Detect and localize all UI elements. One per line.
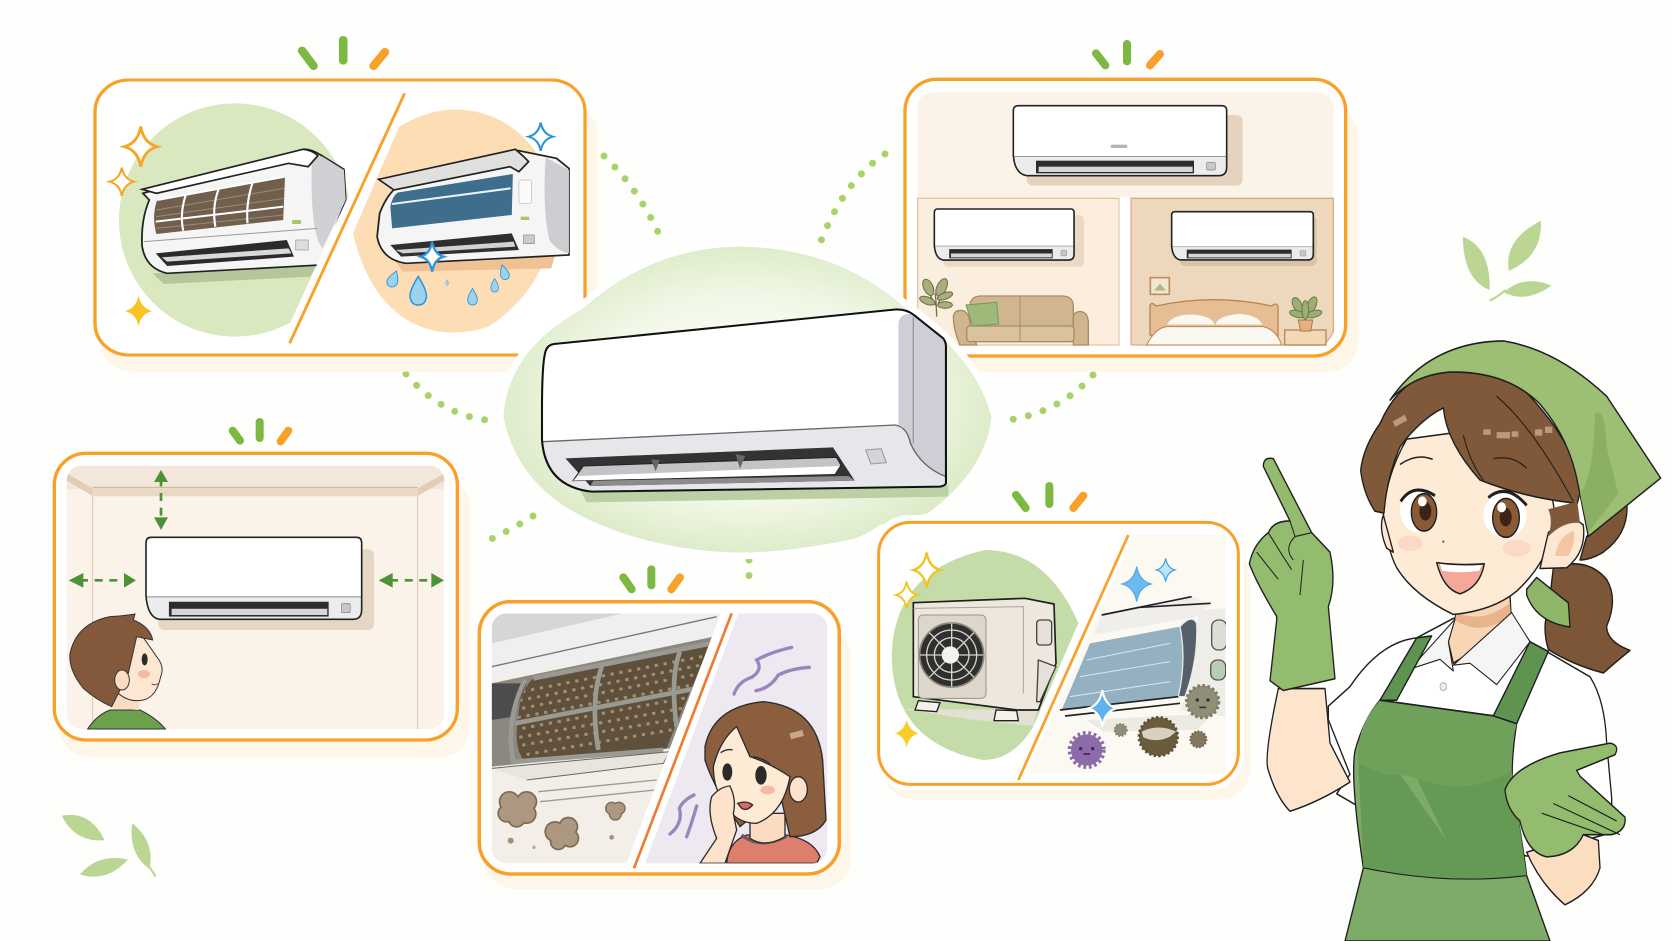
lower band bbox=[543, 425, 946, 492]
room wall bbox=[67, 466, 444, 729]
panel: dirty filter and odor bbox=[479, 569, 851, 889]
dust clumps bbox=[497, 791, 626, 850]
connector dots bbox=[406, 154, 1093, 588]
accent ticks bbox=[233, 422, 288, 441]
green blob bbox=[503, 247, 991, 553]
panel frame bbox=[95, 80, 585, 355]
accent ticks bbox=[1096, 44, 1160, 65]
panel shadow bbox=[485, 627, 851, 889]
right air conditioner open bbox=[377, 149, 569, 272]
panel shadow bbox=[883, 547, 1250, 799]
left air conditioner open bbox=[142, 149, 346, 284]
divider bbox=[1018, 535, 1128, 780]
panel: three rooms bbox=[905, 44, 1358, 372]
sparkles blue bbox=[529, 122, 553, 151]
odor side bbox=[645, 613, 827, 863]
apron shading bbox=[1358, 763, 1527, 878]
pointing glove bbox=[1249, 458, 1335, 690]
ear left bbox=[1381, 515, 1393, 552]
room: living bbox=[918, 198, 1119, 345]
bed bbox=[1150, 300, 1278, 338]
air conditioner bbox=[146, 537, 374, 630]
plant and nightstand bbox=[1285, 330, 1326, 345]
sparkles bbox=[896, 552, 940, 608]
orange backdrop bbox=[353, 109, 555, 333]
unit shadow bbox=[580, 485, 948, 502]
germs bbox=[1070, 686, 1219, 767]
panel shadow bbox=[912, 107, 1358, 372]
dirty unit closeup bbox=[492, 613, 827, 863]
hair highlights bbox=[1393, 415, 1552, 438]
eyes bbox=[1400, 457, 1527, 538]
divider bbox=[290, 93, 405, 343]
face bbox=[1383, 427, 1555, 614]
water drops bbox=[385, 264, 510, 305]
clean filter side bbox=[1027, 535, 1227, 773]
sparkles blue bbox=[1122, 566, 1151, 601]
panel halo bbox=[873, 515, 1244, 790]
unit outline bbox=[542, 309, 946, 492]
green backdrop bbox=[119, 103, 351, 337]
unit body bbox=[542, 309, 946, 492]
sofa bbox=[970, 296, 1073, 327]
boy looking up bbox=[70, 614, 165, 729]
room gap bbox=[1120, 198, 1130, 346]
picture bbox=[1150, 278, 1169, 294]
odor waves bbox=[670, 647, 809, 837]
room: bedroom bbox=[1131, 198, 1333, 345]
ear right bbox=[1540, 520, 1584, 569]
hair tie bbox=[1527, 577, 1570, 627]
worried woman bbox=[700, 702, 826, 863]
accent ticks bbox=[623, 569, 680, 589]
divider bbox=[634, 613, 732, 868]
accent ticks bbox=[1016, 486, 1083, 508]
air conditioner large bbox=[1013, 106, 1243, 186]
back hair bbox=[1580, 501, 1627, 560]
wall top bbox=[918, 92, 1333, 198]
central air conditioner bbox=[503, 247, 991, 553]
accent ticks bbox=[302, 40, 385, 66]
sensor bbox=[866, 449, 886, 464]
character: cleaning staff woman bbox=[1249, 341, 1661, 941]
sparkles bbox=[110, 127, 157, 196]
open hand glove bbox=[1505, 743, 1625, 857]
neck bbox=[1448, 595, 1512, 663]
hair lock by ear bbox=[1548, 501, 1580, 537]
apron straps bbox=[1380, 636, 1548, 724]
green backdrop bbox=[892, 550, 1078, 760]
raised arm bbox=[1267, 689, 1350, 811]
hair bbox=[1361, 367, 1582, 513]
headscarf bbox=[1390, 341, 1661, 537]
collar bbox=[1410, 613, 1530, 685]
panel: clearance around unit bbox=[54, 422, 470, 757]
plant bbox=[923, 280, 947, 317]
blush bbox=[1397, 535, 1423, 551]
vent bbox=[565, 447, 855, 486]
shirt bbox=[1328, 613, 1612, 856]
white cut right of divider bbox=[281, 87, 584, 353]
side panel bbox=[898, 314, 946, 477]
panel: outdoor unit and germs bbox=[873, 486, 1250, 799]
leaves bottom left bbox=[62, 815, 156, 877]
right wrist bbox=[1527, 835, 1600, 905]
mouth bbox=[1437, 563, 1484, 594]
outdoor unit bbox=[903, 598, 1056, 726]
ponytail bbox=[1545, 564, 1630, 673]
apron bbox=[1345, 700, 1550, 941]
panel: cleaning before and after bbox=[95, 40, 597, 372]
filter grime bbox=[513, 655, 710, 757]
clearance arrows bbox=[80, 478, 435, 580]
panel shadow bbox=[60, 477, 470, 757]
panel shadow bbox=[100, 103, 597, 372]
leaves top right bbox=[1463, 221, 1551, 301]
